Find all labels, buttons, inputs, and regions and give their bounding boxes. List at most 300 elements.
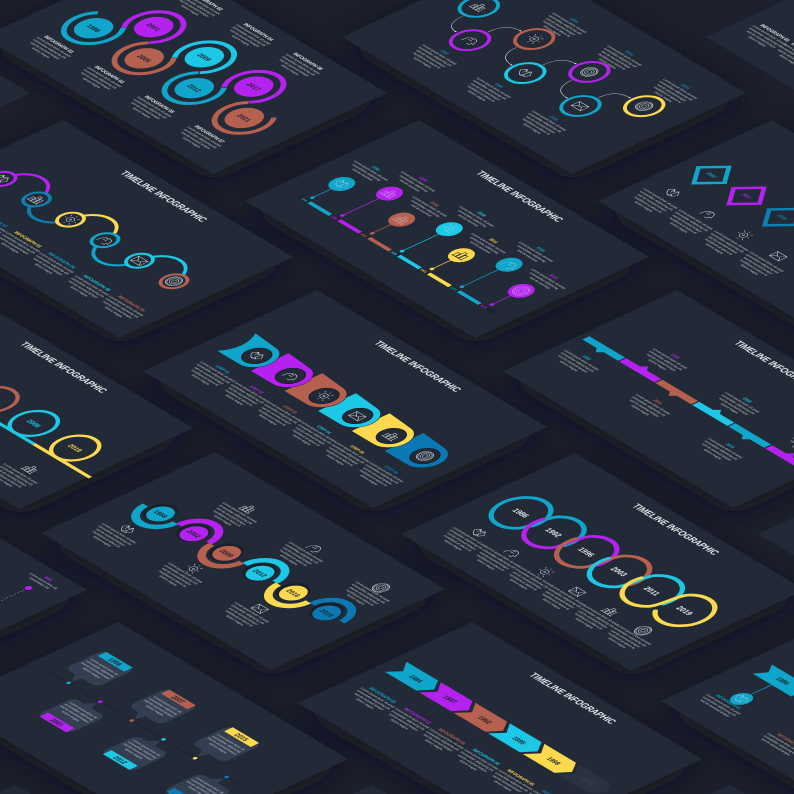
panel: flow rings with arrows: dolore magna	[542, 25, 563, 37]
panel: flow rings with arrows: 1992	[438, 49, 451, 56]
panel: flow rings with arrows: 1994	[568, 17, 581, 24]
panel: step shapes timeline: sed do eiusmod tempor	[327, 446, 360, 465]
panel: segmented bar timeline: consectetur adipiscing elit	[703, 440, 740, 461]
panel: wave timeline: consectetur adipiscing elit	[34, 254, 71, 276]
panel: ring circles timeline: 1998	[84, 24, 102, 34]
panel: chained rings timeline: Lorem ipsum dolor sit amet	[517, 565, 555, 587]
panel: flow rings with arrows: incididunt ut labore et	[466, 85, 497, 103]
panel: ring circles timeline: Lorem ipsum dolor sit amet	[35, 36, 73, 58]
panel: flow rings with arrows: 2002	[624, 50, 636, 57]
panel: chevron timeline	[298, 622, 702, 794]
panel: step shapes timeline: incididunt ut labore et	[358, 469, 389, 487]
panel: wave timeline: sed do eiusmod tempor	[102, 301, 134, 320]
panel: flow rings with arrows: Lorem ipsum dolor sit amet	[606, 45, 644, 67]
panel: wave timeline: INFOGRAPH 06	[116, 295, 147, 312]
panel: diamonds timeline: Lorem ipsum dolor sit amet	[677, 209, 715, 231]
panel: chevron timeline: 1987	[440, 695, 459, 705]
panel: chevron timeline: consectetur adipiscing elit	[390, 710, 426, 731]
panel: callout boxes timeline: Lorem ipsum dolor sit	[194, 777, 226, 794]
panel: diamonds timeline: 2002	[705, 172, 718, 179]
panel: segmented bar timeline: dolore magna	[630, 404, 651, 416]
panel: diamonds timeline	[598, 120, 794, 338]
panel: top right slide: Lorem ipsum dolor sit amet	[751, 25, 789, 47]
panel: half ring timeline: Lorem ipsum dolor sit amet	[287, 541, 325, 563]
panel: wave timeline: sed do eiusmod tempor	[32, 257, 65, 276]
panel: chained rings timeline: incididunt ut labore et	[508, 573, 539, 591]
panel: ribbon pin slide	[661, 620, 794, 794]
panel: chevron timeline: INFOGRAPH 04	[471, 748, 502, 766]
panel: diamonds timeline: incididunt ut labore et	[668, 217, 699, 235]
panel: half ring timeline: consectetur adipiscing elit	[218, 504, 254, 525]
panel: step shapes timeline: STEP 03	[281, 404, 299, 415]
panel: step shapes timeline: sed do eiusmod tempor	[361, 467, 394, 486]
panel: step shapes timeline: incididunt ut labore et	[324, 449, 355, 467]
panel: segmented bar timeline: sed do eiusmod tempor	[717, 397, 750, 416]
panel: step shapes timeline: consectetur adipiscing elit	[297, 424, 333, 445]
panel: ring circles timeline: sed do eiusmod tempor	[29, 41, 62, 60]
panel: segmented bar timeline: consectetur adipiscing elit	[631, 396, 667, 417]
panel: segmented bar timeline: 2001	[652, 399, 665, 405]
panel: chained rings timeline: sed do eiusmod tempor	[544, 590, 577, 609]
panel: balloon timeline: consectetur adipiscing	[528, 272, 560, 290]
panel: wave timeline: consectetur adipiscing elit	[1, 233, 37, 255]
panel: step shapes timeline: incididunt ut labore et	[224, 389, 255, 407]
panel: half ring timeline: dolore magna	[212, 515, 233, 526]
panel: segmented bar timeline: Lorem ipsum dolor sit amet	[651, 348, 689, 370]
panel: step shapes timeline: dolore magna	[224, 394, 245, 406]
panel: chevron timeline: TIMELINE INFOGRAPHIC	[526, 672, 619, 725]
panel: segmented bar timeline: dolore magna	[719, 403, 740, 414]
panel: diamonds timeline: consectetur adipiscing elit	[674, 211, 710, 232]
panel: step shapes timeline: consectetur adipiscing elit	[229, 383, 266, 405]
panel: blank slide bottom left	[0, 785, 246, 794]
panel: callout boxes timeline: consectetur adipiscing	[84, 660, 116, 678]
panel: ring circles timeline: 2001	[144, 23, 162, 33]
panel: ring circles timeline: sed do eiusmod tempor	[80, 72, 112, 91]
panel: chevron timeline: dolore magna	[389, 718, 410, 730]
panel: half ring timeline: sed do eiusmod tempor	[215, 507, 248, 526]
panel: wave timeline: Lorem ipsum dolor sit amet	[4, 231, 42, 253]
panel: wave timeline: dolore magna	[69, 285, 89, 297]
panel: callout boxes timeline: consectetur adipiscing	[211, 735, 242, 753]
panel: flow rings with arrows: sed do eiusmod tempor	[600, 50, 633, 69]
panel: step shapes timeline: incididunt ut labore et	[190, 369, 221, 387]
panel: balloon timeline: 2008	[476, 211, 488, 218]
panel: flow rings with arrows	[342, 0, 746, 174]
panel: ribbon pin slide: consectetur adipiscing elit	[701, 696, 738, 717]
panel: chevron timeline: 1998	[544, 756, 562, 766]
panel: step shapes timeline: STEP 05	[348, 445, 367, 455]
panel: balloon timeline: 2002	[429, 201, 441, 208]
panel: chevron timeline: sed do eiusmod tempor	[387, 713, 420, 732]
panel: chevron timeline: dolore magna	[424, 739, 444, 751]
panel: balloon timeline: 1996	[370, 165, 382, 172]
panel: half ring timeline: consectetur adipiscing elit	[350, 583, 387, 604]
panel: balloon timeline: sed do eiusmod	[456, 214, 480, 227]
panel: wave timeline: dolore magna	[33, 263, 54, 275]
panel: looped ring timeline left: Lorem ipsum dolor sit amet	[2, 463, 40, 485]
panel: balloon timeline: 2015	[449, 286, 458, 292]
panel: blank slide top left	[0, 0, 30, 174]
panel: chevron timeline: Lorem ipsum dolor sit amet	[394, 707, 431, 729]
panel: chevron timeline: sed do eiusmod tempor	[353, 692, 386, 711]
panel: step shapes timeline: sed do eiusmod tempor	[260, 406, 293, 425]
panel: balloon timeline: sed do eiusmod	[528, 276, 551, 289]
panel: flow rings with arrows: Lorem ipsum dolor sit amet	[530, 110, 568, 132]
panel: flow rings with arrows: dolore magna	[597, 58, 618, 69]
panel: step shapes timeline: sed do eiusmod tempor	[193, 366, 226, 385]
panel: ring circles timeline: INFOGRAPH 04	[241, 23, 275, 42]
panel: callout boxes timeline	[0, 622, 348, 794]
panel: step shapes timeline: Lorem ipsum dolor sit amet	[300, 421, 338, 443]
panel: chained rings timeline: incididunt ut labore et	[541, 593, 572, 611]
panel: step shapes timeline: consectetur adipiscing elit	[364, 464, 400, 485]
panel: ring circles timeline: dolore magna	[31, 47, 51, 59]
panel: callout boxes timeline: Lorem ipsum dolor sit	[89, 658, 120, 676]
panel: chained rings timeline: sed do eiusmod tempor	[511, 571, 544, 590]
panel: diamonds timeline: Lorem ipsum dolor sit amet	[642, 188, 680, 210]
panel: flow rings with arrows: 2010	[679, 83, 692, 90]
panel: balloon timeline: Lorem ipsum dolor sit amet	[470, 232, 508, 254]
panel: step shapes timeline: dolore magna	[359, 474, 379, 486]
panel: chevron timeline: 1995	[509, 736, 528, 746]
panel: segmented bar timeline: Lorem ipsum dolor sit amet	[707, 437, 744, 459]
panel: balloon timeline: 1996	[299, 197, 309, 202]
panel: balloon timeline: sed do eiusmod	[398, 179, 421, 192]
panel: step shapes timeline: incididunt ut labore et	[291, 429, 322, 447]
panel: half ring timeline: 2016	[284, 589, 302, 598]
panel: half ring timeline: 2019	[317, 608, 335, 618]
panel: step shapes timeline: dolore magna	[325, 454, 345, 466]
panel: balloon timeline: Lorem ipsum dolor sit amet	[530, 268, 568, 290]
panel: chevron timeline: Lorem ipsum dolor sit amet	[428, 728, 466, 750]
panel: balloon timeline: 2019	[479, 304, 488, 309]
panel: balloon timeline: Lorem ipsum dolor sit amet	[352, 160, 390, 182]
panel: balloon timeline	[245, 120, 649, 338]
panel: dotted line slide: Lorem ipsum dolor sit	[28, 572, 59, 590]
panel: looped ring timeline left: 2008	[24, 419, 42, 429]
panel: flow rings with arrows: 2006	[548, 115, 561, 122]
panel: callout boxes timeline: 1998	[105, 657, 124, 667]
panel: half ring timeline: consectetur adipiscing elit	[97, 525, 133, 546]
panel: ring circles timeline: sed do eiusmod tempor	[180, 131, 213, 150]
panel: diamonds timeline: 2009	[776, 214, 789, 221]
panel: ring circles timeline: Lorem ipsum dolor sit amet	[284, 53, 322, 75]
panel: ring circles timeline: consectetur adipiscing elit	[182, 128, 219, 149]
panel: half ring timeline: incididunt ut labore et	[157, 570, 188, 588]
panel: balloon timeline: Lorem ipsum dolor sit amet	[411, 196, 449, 218]
panel: ribbon pin slide: sed do eiusmod tempor	[699, 699, 732, 718]
panel: balloon timeline: Lorem ipsum dolor sit amet	[458, 206, 496, 228]
panel: step shapes timeline: dolore magna	[258, 414, 278, 426]
panel: balloon timeline: sed do eiusmod	[351, 168, 374, 181]
panel: top right slide: sed do eiusmod tempor	[745, 30, 778, 49]
panel: flow rings with arrows: sed do eiusmod tempor	[655, 83, 688, 103]
panel: chevron timeline: consectetur adipiscing elit	[355, 689, 392, 710]
panel: chained rings timeline: dolore magna	[574, 617, 595, 629]
panel: ring circles timeline: 2005	[134, 54, 153, 64]
panel: half ring timeline: Lorem ipsum dolor sit amet	[101, 522, 138, 544]
panel: chained rings timeline: dolore magna	[607, 637, 627, 649]
panel: half ring timeline: incididunt ut labore et	[278, 549, 309, 567]
panel: looped ring timeline left	[0, 291, 195, 510]
panel: flow rings with arrows: Lorem ipsum dolor sit amet	[475, 77, 513, 99]
panel: step shapes timeline: incididunt ut labore et	[257, 409, 288, 427]
panel: diamonds timeline: consectetur adipiscing elit	[709, 232, 746, 254]
panel: chevron timeline: INFOGRAPH 03	[437, 728, 467, 745]
panel: diamonds timeline: sed do eiusmod tempor	[707, 235, 740, 254]
panel: ribbon pin slide: INFOGRAPH 01	[714, 694, 743, 710]
panel: chained rings timeline: dolore magna	[508, 578, 529, 590]
panel: half ring timeline: Lorem ipsum dolor sit amet	[167, 562, 204, 584]
panel: balloon timeline: consectetur adipiscing	[469, 236, 500, 254]
panel: wave timeline: INFOGRAPH 05	[82, 274, 112, 292]
panel: flow rings with arrows: consectetur adipiscing elit	[547, 14, 584, 36]
panel: chained rings timeline: 1996	[575, 546, 597, 558]
panel: segmented bar timeline: Lorem ipsum dolor sit amet	[563, 349, 601, 371]
panel: ring circles timeline: consectetur adipiscing elit	[132, 98, 169, 120]
panel: wave timeline: dolore magna	[0, 242, 20, 254]
panel: segmented bar timeline: sed do eiusmod tempor	[628, 399, 661, 418]
panel: diamonds timeline: dolore magna	[739, 264, 760, 276]
panel: chevron timeline: sed do eiusmod tempor	[456, 754, 489, 773]
panel: ring circles timeline: dolore magna	[180, 4, 200, 16]
panel: top right slide: INFOGRAPH 01	[758, 24, 791, 43]
panel: ring circles timeline: Lorem ipsum dolor sit amet	[86, 66, 123, 88]
panel: chained rings timeline: sed do eiusmod tempor	[445, 532, 478, 551]
panel: ring circles timeline: dolore magna	[131, 107, 152, 119]
panel: flow rings with arrows: consectetur adipiscing elit	[417, 46, 454, 67]
panel: chained rings timeline: sed do eiusmod tempor	[577, 610, 609, 629]
panel: step shapes timeline: STEP 06	[382, 465, 400, 475]
panel: segmented bar timeline: dolore magna	[702, 448, 723, 460]
panel: chained rings timeline: 2011	[641, 585, 663, 597]
panel: chained rings timeline: TIMELINE INFOGRAPHIC	[629, 503, 722, 556]
panel: wave timeline: consectetur adipiscing elit	[104, 298, 141, 319]
panel: chained rings timeline: dolore magna	[541, 598, 562, 610]
panel: wave timeline: INFOGRAPH 04	[46, 252, 77, 269]
panel: wave timeline: consectetur adipiscing elit	[70, 277, 106, 298]
panel: callout boxes timeline: 2012	[111, 756, 129, 765]
panel: chained rings timeline: incididunt ut labore et	[573, 612, 604, 630]
panel: chevron timeline: 1984	[406, 674, 424, 684]
panel: flow rings with arrows: sed do eiusmod tempor	[415, 49, 448, 68]
panel: step shapes timeline: dolore magna	[291, 434, 312, 446]
panel: step shapes timeline	[143, 290, 547, 508]
panel: wave timeline: Lorem ipsum dolor sit amet	[73, 275, 111, 297]
panel: top right slide	[706, 0, 794, 174]
panel: flow rings with arrows: incididunt ut labore et	[652, 86, 683, 104]
panel: dotted line slide: consectetur elit	[28, 577, 51, 590]
panel: balloon timeline: 2011	[488, 238, 500, 244]
panel: chevron timeline: Lorem ipsum dolor sit amet	[359, 687, 397, 709]
panel: balloon timeline: consectetur adipiscing	[410, 199, 441, 218]
panel: balloon timeline: 2008	[389, 251, 399, 256]
panel: flow rings with arrows: dolore magna	[466, 90, 487, 102]
panel: chevron timeline: consectetur adipiscing elit	[424, 730, 461, 752]
panel: half ring timeline: incididunt ut labore et	[345, 589, 376, 607]
panel: chained rings timeline: consectetur adipiscing elit	[481, 548, 517, 569]
panel: diamonds timeline: consectetur adipiscing elit	[638, 190, 675, 211]
panel: wave timeline: Lorem ipsum dolor sit amet	[108, 295, 145, 317]
panel: callout boxes timeline: consectetur adipiscing	[126, 741, 158, 759]
panel: segmented bar timeline: 2003	[741, 397, 754, 404]
panel: diamonds timeline: sed do eiusmod tempor	[671, 214, 704, 233]
panel: step shapes timeline: Lorem ipsum dolor sit amet	[233, 381, 271, 403]
panel: ring circles timeline: 2021	[235, 113, 253, 123]
panel: chevron timeline: INFOGRAPH 01	[368, 687, 398, 704]
panel: half ring timeline: 2012	[250, 569, 268, 579]
panel: segmented bar timeline: 1995	[669, 353, 682, 360]
panel: flow rings with arrows: sed do eiusmod tempor	[524, 115, 557, 134]
panel: segmented bar timeline: sed do eiusmod tempor	[701, 443, 733, 462]
panel: callout boxes timeline: dolore magna	[144, 705, 165, 716]
panel: half ring timeline: consectetur adipiscing elit	[230, 604, 266, 625]
panel: half ring timeline: dolore magna	[345, 594, 366, 605]
panel: balloon timeline: 2019	[547, 273, 560, 280]
panel: segmented bar timeline: consectetur adipiscing elit	[559, 352, 596, 373]
panel: half ring timeline: 2002	[184, 529, 202, 539]
panel: ring circles timeline: dolore magna	[280, 64, 300, 76]
panel: chained rings timeline: 2019	[674, 605, 695, 617]
panel: blank slide bottom middle	[198, 785, 602, 794]
panel: step shapes timeline: Lorem ipsum dolor sit amet	[334, 441, 371, 463]
panel: chained rings timeline: incididunt ut labore et	[606, 632, 637, 650]
panel: chevron timeline: Lorem ipsum dolor sit amet	[497, 769, 535, 791]
panel: top right slide: consectetur adipiscing elit	[748, 27, 784, 48]
panel: ring circles timeline: dolore magna	[230, 35, 251, 46]
panel: step shapes timeline: sed do eiusmod tempor	[227, 386, 260, 406]
panel: ring circles timeline: INFOGRAPH 03	[92, 65, 126, 85]
panel: callout boxes timeline: 2001	[47, 718, 66, 728]
panel: ribbon pin slide: 1986	[773, 676, 791, 686]
panel: ring circles timeline: Lorem ipsum dolor sit amet	[136, 96, 173, 118]
panel: segmented bar timeline: sed do eiusmod tempor	[557, 355, 590, 374]
panel: ring circles timeline: 2017	[244, 82, 262, 92]
panel: diamonds timeline: dolore magna	[668, 222, 689, 233]
panel: callout boxes timeline: sed do eiusmod tempor	[143, 699, 176, 718]
panel: callout boxes timeline: dolore magna	[208, 742, 228, 754]
panel: callout boxes timeline: dolore magna	[60, 710, 81, 722]
panel: chained rings timeline: 1992	[542, 527, 564, 539]
panel: segmented bar timeline: 1992	[581, 354, 593, 361]
panel: ring circles timeline: Lorem ipsum dolor sit amet	[235, 24, 272, 46]
panel: chevron timeline: Lorem ipsum dolor sit amet	[463, 749, 500, 770]
panel: flow rings with arrows: dolore magna	[653, 91, 674, 103]
panel: step shapes timeline: consectetur adipiscing elit	[263, 403, 299, 425]
panel: chained rings timeline: dolore magna	[443, 539, 464, 551]
panel: chevron timeline: consectetur adipiscing elit	[459, 751, 495, 772]
panel: dotted line slide	[0, 453, 87, 671]
panel: flow rings with arrows: incididunt ut labore et	[521, 118, 552, 136]
panel: chained rings timeline: consectetur adipiscing elit	[612, 626, 648, 648]
panel: balloon timeline: 1999	[329, 215, 339, 220]
panel: ring circles timeline: INFOGRAPH 07	[192, 125, 226, 144]
panel: callout boxes timeline: sed do eiusmod tempor	[79, 661, 112, 681]
panel: ribbon pin slide: sed do eiusmod tempor	[760, 738, 793, 757]
panel: segmented bar timeline: dolore magna	[647, 359, 668, 370]
panel: chevron timeline: INFOGRAPH 02	[402, 707, 433, 725]
panel: flow rings with arrows: Lorem ipsum dolor sit amet	[662, 78, 699, 100]
panel: chained rings timeline: consectetur adipiscing elit	[448, 529, 484, 550]
panel: ring circles timeline: consectetur adipiscing elit	[82, 69, 119, 90]
panel: looped ring timeline left: 2019	[65, 444, 84, 453]
panel: diamonds timeline: consectetur adipiscing elit	[744, 253, 781, 274]
panel: callout boxes timeline: dolore magna	[81, 667, 102, 679]
panel: segmented bar timeline: consectetur adipiscing elit	[648, 350, 684, 371]
panel: diamonds timeline: incididunt ut labore et	[739, 259, 770, 277]
panel: ring circles timeline: INFOGRAPH 05	[142, 95, 176, 114]
panel: blank slide bottom right	[556, 785, 794, 794]
panel: chained rings timeline: incididunt ut labore et	[442, 534, 473, 552]
panel: callout boxes timeline: consectetur adipiscing	[147, 697, 179, 716]
panel: step shapes timeline: TIMELINE INFOGRAPHIC	[371, 340, 464, 393]
panel: chevron timeline: consectetur adipiscing elit	[493, 771, 530, 793]
panel: segmented bar timeline: Lorem ipsum dolor sit amet	[634, 394, 672, 415]
panel: balloon timeline: Lorem ipsum dolor sit amet	[399, 171, 437, 193]
panel: callout boxes timeline: consectetur adipiscing	[63, 703, 95, 721]
panel: flow rings with arrows: incididunt ut labore et	[541, 20, 572, 38]
panel: wave timeline: INFOGRAPH 03	[13, 231, 43, 248]
panel: balloon timeline: sed do eiusmod	[468, 241, 492, 254]
panel: ring circles timeline: sed do eiusmod tempor	[229, 29, 262, 48]
panel: chained rings timeline: incididunt ut labore et	[475, 554, 506, 572]
panel: chained rings timeline: Lorem ipsum dolor sit amet	[452, 526, 489, 548]
panel: chevron timeline: dolore magna	[355, 698, 375, 710]
panel: diamonds timeline: dolore magna	[633, 201, 654, 213]
panel: ring circles timeline: INFOGRAPH 01	[41, 35, 75, 54]
panel: flow rings with arrows: consectetur adipiscing elit	[602, 47, 639, 68]
panel: segmented bar timeline: Lorem ipsum dolor sit amet	[724, 392, 761, 414]
panel: half ring timeline: dolore magna	[158, 575, 179, 587]
panel: balloon timeline: TIMELINE INFOGRAPHIC	[473, 170, 566, 223]
panel: diamonds timeline: incididunt ut labore et	[703, 238, 734, 256]
panel: segmented bar timeline: dolore magna	[558, 360, 579, 372]
panel: diamonds timeline: Lorem ipsum dolor sit amet	[748, 251, 786, 273]
panel: looped ring timeline left: TIMELINE INFOGRAPHIC	[17, 341, 110, 394]
panel: step shapes timeline: dolore magna	[190, 374, 211, 386]
panel: half ring timeline: consectetur adipiscing elit	[163, 564, 199, 585]
panel: ring circles timeline: INFOGRAPH 06	[291, 52, 324, 71]
panel: chevron timeline: 2001	[578, 777, 597, 787]
panel: balloon timeline: consectetur adipiscing	[457, 209, 488, 228]
panel: diamonds timeline: dolore magna	[704, 243, 725, 255]
panel: ring circles timeline: 2012	[184, 84, 203, 94]
panel: balloon timeline: 2002	[359, 233, 369, 238]
panel: balloon timeline: consectetur adipiscing	[516, 245, 547, 263]
panel: half ring timeline: 2009	[217, 549, 235, 559]
panel: chained rings timeline: consectetur adipiscing elit	[514, 568, 550, 589]
panel: half ring timeline: Lorem ipsum dolor sit amet	[221, 502, 259, 524]
panel: step shapes timeline: sed do eiusmod tempor	[294, 427, 327, 446]
panel: chained rings timeline: consectetur adipiscing elit	[546, 587, 583, 609]
panel: step shapes timeline: Lorem ipsum dolor sit amet	[266, 401, 304, 423]
panel: chevron timeline: dolore magna	[458, 759, 479, 771]
panel: callout boxes timeline: sed do eiusmod tempor	[206, 737, 239, 756]
panel: chevron timeline: dolore magna	[493, 780, 513, 792]
panel: flow rings with arrows: incididunt ut labore et	[411, 52, 442, 70]
panel: half ring timeline	[41, 452, 445, 670]
panel: half ring timeline: sed do eiusmod tempor	[348, 586, 381, 605]
panel: segmented bar timeline	[503, 290, 794, 508]
panel: ring circles timeline: 2009	[195, 53, 213, 63]
panel: wave timeline: TIMELINE INFOGRAPHIC	[117, 170, 210, 223]
panel: callout boxes timeline: Lorem ipsum dolor sit	[152, 696, 183, 714]
panel: step shapes timeline: consectetur adipiscing elit	[330, 443, 366, 465]
panel: chained rings timeline: Lorem ipsum dolor sit amet	[550, 585, 588, 607]
panel: chained rings timeline: Lorem ipsum dolor sit amet	[484, 546, 522, 568]
panel: diamonds timeline: sed do eiusmod tempor	[636, 193, 669, 212]
